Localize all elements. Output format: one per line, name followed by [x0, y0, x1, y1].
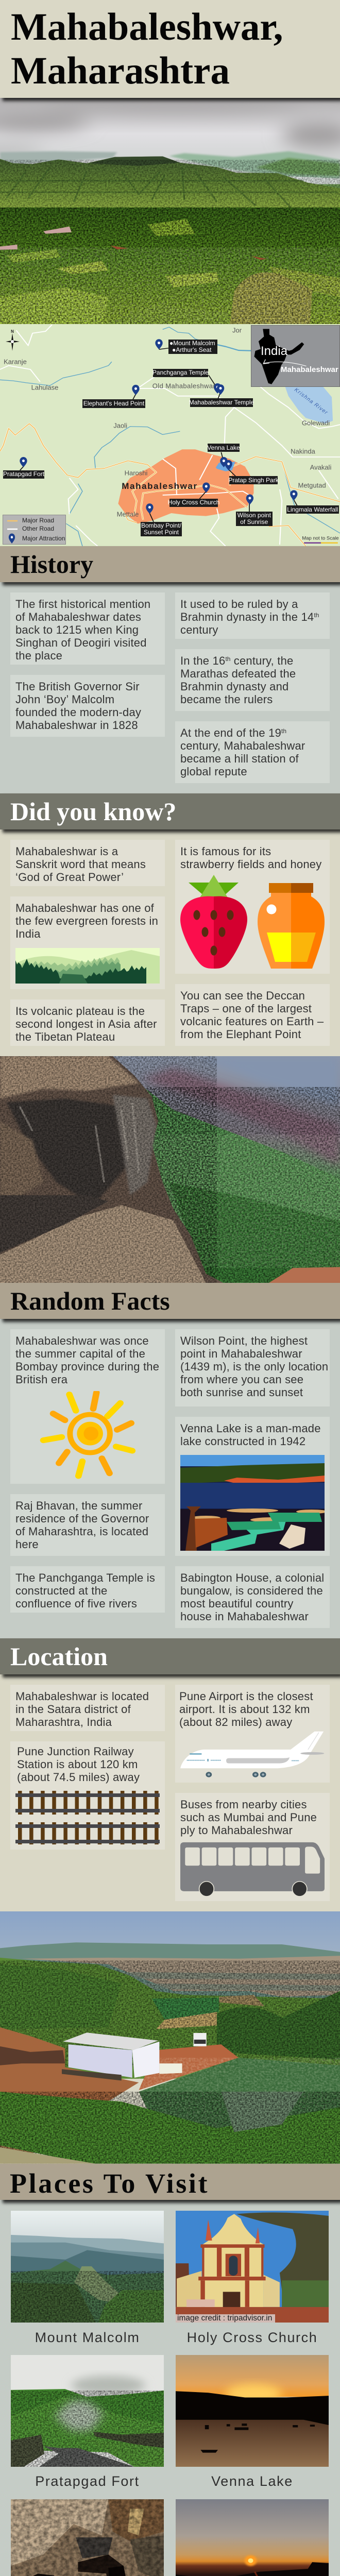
fact card: Babington House, a colonial [180, 1571, 324, 1584]
fact card: global repute [180, 765, 247, 778]
fact card: Singhan of Deogiri visited [15, 636, 147, 649]
callout: Mahabaleshwar Temple: Mahabaleshwar Temple [189, 399, 254, 406]
fact card [10, 1685, 165, 1731]
fact card: from the Elephant Point [180, 1027, 301, 1041]
place: Rajpuri Caves [11, 2499, 164, 2576]
heading bar: Location [0, 1638, 340, 1674]
heading bar: Did you know?: Did you know? [10, 797, 176, 826]
photo: Holy Cross Church [176, 2211, 329, 2323]
fact card [10, 999, 165, 1046]
callout: Wilson point of Sunrise: of Sunrise [240, 518, 268, 526]
map label: Lahulase: Lahulase [31, 383, 58, 391]
title [11, 6, 283, 92]
callout: Wilson point of Sunrise [236, 512, 273, 526]
fact card with strawberry and honey icons [175, 840, 330, 974]
place: Wilson point of Sunrise [176, 2499, 329, 2576]
fact card: Marathas defeated the [180, 667, 296, 680]
fact card with sun illustration: Bombay province during the [15, 1360, 159, 1372]
fact card: Mahabaleshwar in 1828 [15, 718, 138, 732]
fact card with aeroplane: airport. It is about 132 km [179, 1702, 310, 1716]
fact card [10, 675, 165, 737]
map label: Karanje: Karanje [4, 358, 27, 366]
map label: Jor: Jor [232, 327, 242, 334]
fact card: At the end of the 19th [180, 726, 286, 739]
fact card: Its volcanic plateau is the [15, 1005, 145, 1017]
fact card [175, 649, 330, 711]
note: Map not to Scale: Map not to Scale [302, 536, 339, 541]
fact card with sun illustration: British era [15, 1372, 67, 1386]
icon: sun [40, 1391, 136, 1479]
fact card with sun illustration: the summer capital of the [15, 1347, 145, 1360]
title band [0, 0, 340, 98]
fact card with forest illustration [10, 896, 165, 989]
fact card [10, 1494, 165, 1556]
fact card: most beautiful country [180, 1597, 294, 1609]
photo: boats on Venna Lake [180, 1455, 325, 1551]
caption: Venna Lake: Venna Lake [211, 2473, 293, 2489]
fact card with sun illustration [10, 1329, 165, 1484]
fact card with bus: ply to Mahabaleshwar [180, 1824, 293, 1836]
legend: Other Road [22, 524, 54, 532]
callout: Bombay Point / Sunset Point: Bombay Point/ [141, 522, 181, 529]
fact card: John ‘Boy’ Malcolm [15, 692, 114, 706]
callout: Holy Cross Church: Holy Cross Church [168, 499, 219, 506]
compass: north star [6, 329, 20, 351]
photo: Wilson Point sunrise [176, 2499, 329, 2576]
heading bar: History [0, 546, 340, 582]
fact card with forest illustration: Mahabaleshwar has one of [15, 902, 154, 914]
fact card [10, 840, 165, 886]
photo: Venna Lake at sunset [176, 2355, 329, 2467]
fact card: constructed at the [15, 1584, 107, 1597]
fact card: second longest in Asia after [15, 1017, 157, 1030]
fact card [175, 1566, 330, 1628]
fact card: bungalow, is considered the [180, 1584, 323, 1597]
callout: Mount Malcolm and Arthur's Seat [168, 339, 217, 354]
fact card with Venna Lake photo [175, 1417, 330, 1556]
heading bar: Places To Visit: Places To Visit [10, 2168, 209, 2199]
callout: Pratapgad Fort: Pratapgad Fort [3, 470, 44, 478]
callout: Venna Lake: Venna Lake [207, 444, 240, 451]
map label: Avakali: Avakali [310, 464, 331, 471]
inset: India locator [251, 325, 340, 386]
panel: history [0, 582, 340, 793]
title: Maharashtra [11, 49, 230, 92]
fact card: volcanic features on Earth – [180, 1015, 324, 1027]
fact card: residence of the Governor [15, 1512, 149, 1525]
photo: Mount Malcolm [11, 2211, 164, 2323]
fact card: Raj Bhavan, the summer [15, 1499, 143, 1512]
fact card: You can see the Deccan [180, 989, 305, 1002]
panel: did you know [0, 829, 340, 1056]
fact card: the place [15, 649, 62, 662]
fact card with railway track: Pune Junction Railway [17, 1745, 134, 1758]
legend: Major Attraction [22, 535, 65, 542]
map label: Old Mahabaleshwar: Old Mahabaleshwar [152, 382, 215, 390]
panel: location [0, 1674, 340, 1911]
fact card: Traps – one of the largest [180, 1002, 312, 1015]
photo: Elephant's Head rock and forested valley [0, 1056, 340, 1283]
fact card: became the rulers [180, 692, 273, 706]
icon: bus [180, 1842, 325, 1896]
callout: Mount Malcolm and Arthur's Seat: ●Arthur's Seat [172, 346, 211, 353]
callout: Mount Malcolm and Arthur's Seat: ●Mount Malcolm [169, 340, 215, 347]
map label: Jaoli: Jaoli [113, 421, 127, 430]
fact card: Mahabaleshwar is a [15, 845, 118, 857]
inset: India locator: Mahabaleshwar [281, 365, 338, 374]
fact card [10, 592, 165, 665]
inset: India locator: India [261, 344, 287, 358]
icon: forest silhouette [15, 948, 160, 984]
fact card: century [180, 623, 218, 636]
fact card with Venna Lake photo: lake constructed in 1942 [180, 1434, 305, 1448]
fact card with strawberry and honey icons: strawberry fields and honey [180, 857, 321, 871]
fact card: The first historical mention [15, 598, 150, 610]
map label: Haroshi: Haroshi [125, 469, 147, 477]
place: Venna Lake [176, 2355, 329, 2489]
place: Pratapgad Fort [11, 2355, 164, 2489]
callout: Elephant's Head Point: Elephant's Head Point [83, 400, 144, 407]
fact card: here [15, 1537, 39, 1551]
icons: strawberry and honey jar [180, 875, 325, 969]
caption: Pratapgad Fort: Pratapgad Fort [35, 2473, 140, 2489]
fact card [10, 1566, 165, 1613]
callout: Panchganga Temple: Panchganga Temple [152, 369, 209, 376]
fact card: The British Governor Sir [15, 680, 140, 692]
map label: Mahabaleshwar: Mahabaleshwar [122, 481, 198, 490]
callout: Pratap Singh Park: Pratap Singh Park [228, 476, 279, 483]
fact card: Sanskrit word that means [15, 857, 146, 871]
image credit: image credit : tripadvisor.in [177, 2314, 272, 2323]
fact card with aeroplane: (about 82 miles) away [179, 1716, 292, 1728]
hero photo: green valley and plateau [0, 98, 340, 324]
icon: railway tracks [15, 1791, 160, 1844]
callout: Lingmala Waterfall: Lingmala Waterfall [287, 506, 338, 513]
fact card: In the 16th century, the [180, 654, 294, 667]
photo: Rajpuri Caves [11, 2499, 164, 2576]
caption: Mount Malcolm: Mount Malcolm [35, 2330, 140, 2345]
fact card: Mahabaleshwar is located [15, 1690, 149, 1702]
panel: random facts [0, 1319, 340, 1638]
legend: Major Road [22, 516, 54, 523]
fact card with bus: such as Mumbai and Pune [180, 1810, 317, 1824]
heading bar: Random Facts: Random Facts [10, 1286, 170, 1315]
fact card: of Maharashtra, is located [15, 1525, 148, 1537]
fact card: Maharashtra, India [15, 1716, 112, 1728]
fact card [175, 1329, 330, 1406]
place: Holy Cross Church [176, 2211, 329, 2345]
fact card: century, Mahabaleshwar [180, 739, 305, 752]
map label: Golewadi: Golewadi [302, 419, 330, 427]
callout: Wilson point of Sunrise: Wilson point [237, 512, 271, 519]
fact card with bus: Buses from nearby cities [180, 1798, 307, 1810]
fact card: the Tibetan Plateau [15, 1030, 115, 1043]
fact card with aeroplane: Pune Airport is the closest [179, 1690, 313, 1702]
fact card with railway track: Station is about 120 km [17, 1758, 138, 1771]
fact card: from where you can see [180, 1372, 303, 1386]
panel: places to visit [0, 2200, 340, 2576]
compass: north star: N [11, 329, 14, 334]
fact card with forest illustration: the few evergreen forests in [15, 914, 158, 927]
fact card: (1439 m), is the only location [180, 1360, 328, 1372]
callout: Bombay Point / Sunset Point [141, 522, 182, 536]
heading bar: Places To Visit [0, 2164, 340, 2200]
legend [3, 514, 66, 545]
fact card [175, 984, 330, 1046]
fact card with railway track: (about 74.5 miles) away [17, 1771, 140, 1784]
fact card with railway track [10, 1741, 165, 1850]
fact card with bus [175, 1793, 330, 1901]
photo: strawberry farm with white shed and plateau [0, 1911, 340, 2164]
fact card [175, 721, 330, 783]
heading bar: History: History [10, 550, 93, 579]
map label: Mettale: Mettale [117, 510, 139, 518]
fact card: It used to be ruled by a [180, 598, 298, 610]
fact card: Brahmin dynasty and [180, 680, 288, 692]
fact card with forest illustration: India [15, 927, 41, 940]
fact card: in the Satara district of [15, 1702, 131, 1716]
fact card with sun illustration: Mahabaleshwar was once [15, 1334, 149, 1347]
fact card with Venna Lake photo: Venna Lake is a man-made [180, 1422, 321, 1434]
fact card: ‘God of Great Power’ [15, 871, 124, 883]
map label: Metgutad: Metgutad [298, 481, 326, 489]
title: Mahabaleshwar, [11, 6, 283, 48]
fact card: became a hill station of [180, 752, 299, 765]
fact card: both sunrise and sunset [180, 1386, 303, 1398]
fact card: confluence of five rivers [15, 1597, 137, 1609]
fact card: of Mahabaleshwar dates [15, 610, 141, 623]
fact card: Wilson Point, the highest [180, 1334, 308, 1347]
photo: Pratapgad Fort [11, 2355, 164, 2467]
fact card with strawberry and honey icons: It is famous for its [180, 845, 271, 857]
fact card: house in Mahabaleshwar [180, 1609, 309, 1623]
map label: Nakinda: Nakinda [291, 447, 315, 455]
map artwork: roads, rivers, town area, pins [0, 325, 340, 546]
fact card: point in Mahabaleshwar [180, 1347, 302, 1360]
heading bar: Random Facts [0, 1283, 340, 1319]
fact card with aeroplane [175, 1685, 330, 1783]
fact card: Brahmin dynasty in the 14th [180, 610, 319, 623]
map of Mahabaleshwar [0, 324, 340, 546]
fact card: The Panchganga Temple is [15, 1571, 155, 1584]
heading bar: Location: Location [10, 1642, 108, 1671]
place: Mount Malcolm [11, 2211, 164, 2345]
river label: Krishna River: Krishna River [293, 387, 329, 416]
fact card: founded the modern-day [15, 706, 141, 718]
fact card [175, 592, 330, 639]
fact card: back to 1215 when King [15, 623, 139, 636]
icon: aeroplane [180, 1731, 325, 1777]
heading bar: Did you know? [0, 793, 340, 829]
caption: Holy Cross Church: Holy Cross Church [187, 2330, 317, 2345]
callout: Bombay Point / Sunset Point: Sunset Point [144, 529, 179, 536]
